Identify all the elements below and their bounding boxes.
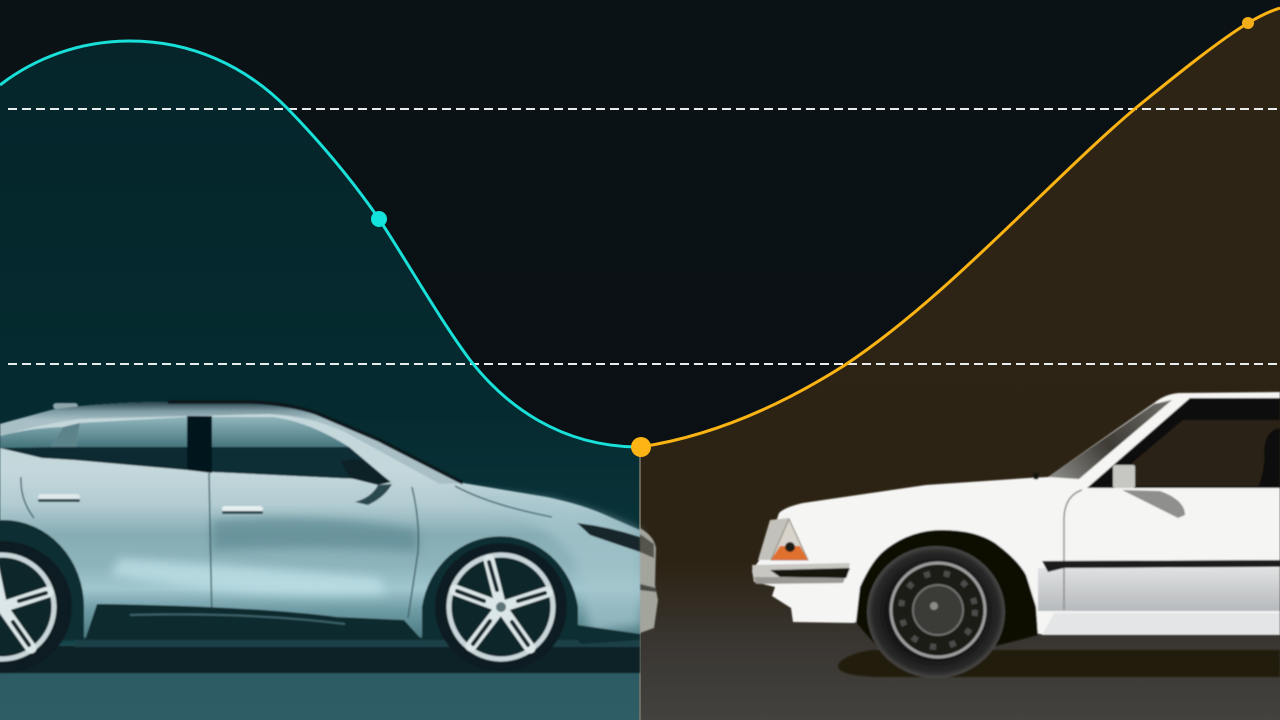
wheel arch — [856, 530, 1038, 655]
teal line: falling value curve — [0, 41, 640, 447]
teal marker — [371, 211, 387, 227]
chrome bumper — [752, 563, 850, 584]
classic white car — [752, 392, 1280, 678]
windshield — [1048, 400, 1172, 479]
side window glass — [1132, 420, 1280, 486]
ground shadow under electric car — [0, 637, 640, 673]
panel: teal area under falling curve — [0, 41, 640, 720]
roof dark edge — [168, 402, 463, 483]
wing mirror and shadow — [341, 459, 392, 505]
side stripe — [1042, 560, 1280, 572]
B pillar — [187, 416, 212, 473]
rear door window — [74, 417, 187, 470]
door shading — [212, 518, 418, 552]
front fender highlight — [463, 490, 640, 632]
rear wheel — [0, 541, 72, 673]
door seams — [21, 473, 552, 624]
headlight — [577, 523, 640, 552]
amber marker: crossover point — [631, 437, 651, 457]
front wheel — [867, 546, 1005, 678]
centre divider — [639, 447, 641, 720]
rear wheel arch — [0, 520, 84, 640]
sill highlight — [130, 614, 345, 624]
panel: amber area under rising curve — [640, 8, 1280, 720]
door handles — [38, 494, 263, 514]
dark lower window reflections — [0, 447, 388, 480]
side skirt — [85, 604, 422, 640]
side window frame — [1087, 398, 1280, 488]
body of classic car — [752, 392, 1280, 635]
lower door panel — [1038, 568, 1280, 611]
lower door reflection — [110, 558, 385, 595]
body of electric car — [0, 402, 640, 640]
headlight — [758, 518, 808, 560]
door mirror shadow — [1122, 490, 1185, 518]
dashed line: lower threshold — [8, 363, 1280, 365]
dashed line: upper threshold — [8, 108, 1280, 110]
amber line: rising value curve — [640, 8, 1280, 447]
front wheel arch — [422, 536, 578, 640]
ground shadow under classic car — [838, 650, 1280, 677]
rear quarter window — [0, 427, 63, 458]
wing mirror — [1113, 465, 1135, 488]
roof band — [0, 402, 463, 484]
front lower valance — [564, 623, 640, 644]
cowl detail — [1032, 472, 1040, 480]
front door window — [212, 417, 388, 480]
nose overlap tint — [640, 528, 658, 633]
front wheel — [435, 543, 567, 671]
door seam — [1064, 490, 1082, 610]
C pillar — [44, 423, 80, 458]
rocker sill — [1042, 613, 1280, 635]
modern electric car — [0, 402, 658, 673]
driver silhouette — [1258, 428, 1280, 488]
roof rack — [53, 403, 78, 409]
amber marker: top right — [1242, 17, 1254, 29]
